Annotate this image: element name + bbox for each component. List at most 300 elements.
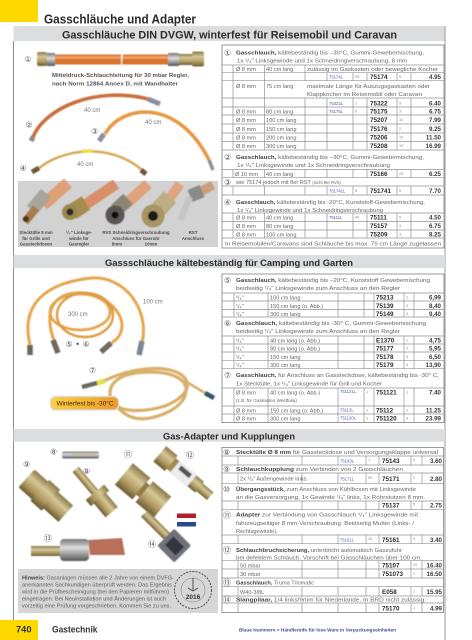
item 4: 100 cm lang	[266, 232, 296, 238]
item 9: 2	[413, 476, 415, 480]
item 6: 80 cm lang (o. Abb.)	[270, 346, 320, 352]
item 7: 751120	[376, 416, 397, 422]
item 5: beidseitig ¹/₄" Linksgewinde zum Anschluss an den Regler	[236, 286, 400, 292]
footer note: Blaue Nummern = Händlerinfo für lose Ware in Verpackungseinheiten	[239, 628, 396, 632]
item 13: 1	[413, 590, 415, 594]
item 6: 300 cm lang	[270, 363, 300, 369]
item 2: 6.25	[429, 171, 442, 178]
item 4: 8.25	[429, 232, 442, 238]
connector captions: Anschluss	[182, 236, 205, 241]
item 7: Ø 8 mm	[236, 408, 256, 414]
connector captions: ¹/₄" Linksge-	[66, 230, 93, 235]
item 3: ③	[224, 178, 231, 187]
item 12: 75107	[382, 562, 400, 570]
item 1: Ø 8 mm	[236, 136, 256, 142]
item 13: W40-3/8L	[240, 590, 264, 596]
picture: fitting 10	[66, 462, 121, 520]
item 5: Gasschlauch, kältebeständig bis –20°C, Kunststoff Gewebemischung	[236, 278, 430, 284]
item 1: 40 cm lang	[266, 67, 293, 73]
table 1: DVGW hoses	[222, 45, 444, 248]
item 3	[224, 178, 442, 195]
picture: fitting 11	[115, 463, 172, 517]
connector captions: Gasregler	[69, 242, 90, 246]
picture: hose 2	[31, 95, 160, 141]
section band 1: Gasschläuche DIN DVGW, winterfest für Reisemobil und Caravan	[62, 30, 397, 42]
item 12	[223, 546, 443, 578]
item 1: 75176	[370, 126, 388, 133]
picture: hose 1	[37, 52, 204, 66]
icon: Dutch flag	[177, 514, 196, 526]
item 1: 6.40	[429, 100, 442, 108]
footer section name: Gastechnik	[52, 624, 98, 636]
item 1: Ø 8 mm	[236, 118, 256, 124]
label: 40 cm: 40 cm	[77, 162, 93, 168]
item 7: 751121	[376, 390, 397, 396]
page frame left line	[13, 41, 14, 620]
item 2: 1x ¹/₄" Linksgewinde und 1x Schneidringverschraubung	[237, 163, 390, 169]
item 13: ⑬	[223, 578, 231, 588]
item 4: 40	[355, 216, 359, 220]
item 12: 10	[413, 563, 417, 567]
item 10: 5	[413, 502, 415, 506]
item 1: 75322	[370, 100, 388, 108]
item 9: ⑨	[223, 465, 230, 474]
item 8: 3.60	[430, 458, 443, 465]
hose 1 description: Mitteldruck-Schlauchleitung für 30 mbar Regler,	[52, 73, 190, 79]
item 12: 50 mbar	[240, 564, 261, 570]
item 1: 25	[355, 75, 359, 79]
item 7: 751121L	[340, 389, 357, 394]
item 5: 3	[406, 312, 408, 316]
item 2	[224, 153, 442, 178]
item 6: 13,90	[426, 362, 442, 369]
item 3: wie 75174 jedoch mit 8er RST (nicht 8er RVS)	[235, 180, 342, 186]
note text: anerkannten Sachkundigen überprüft werden. Das Ergebnis	[22, 582, 172, 588]
item 7: 1	[366, 408, 368, 412]
item 5: 6,99	[429, 294, 442, 302]
item 1: 1	[355, 102, 357, 106]
item 1: Ø 8 mm	[236, 127, 256, 133]
item 3: 751741	[370, 188, 392, 195]
item 14: ⑭	[223, 596, 231, 604]
item 7: 40 cm lang (o. Abb.)	[270, 390, 320, 396]
connector: RVS 10 mm	[142, 184, 180, 228]
item 14: Slangpilaar, 1/4 links/9mm für Niederlande. In BRD nicht zulässig.	[236, 598, 427, 604]
callout: number 14: ⑭	[148, 540, 156, 549]
item 1: 80 cm lang	[266, 110, 293, 116]
item 5: 1	[406, 296, 408, 300]
note text	[22, 576, 174, 610]
item 10	[223, 485, 443, 510]
connector captions: Gassteckdosen	[20, 242, 53, 246]
callout: number 11: ⑪	[124, 450, 132, 459]
callout: number 8: ⑧	[50, 448, 57, 456]
connector captions: 10mm	[145, 242, 157, 246]
item 9: Schlauchkupplung zum Verbinden von 2 Gasschläuchen	[236, 467, 403, 473]
item 5: 75149	[376, 311, 394, 318]
item 4: 75157	[370, 223, 388, 230]
item 7: 150 cm lang (o. Abb.)	[270, 408, 323, 414]
item 1: Ø 8 mm	[236, 144, 256, 150]
item 8: 5	[413, 458, 415, 462]
connector: RVS 8 mm	[106, 184, 148, 224]
picture: fitting 8	[62, 452, 99, 458]
item 7: Ø 8 mm	[236, 390, 256, 396]
item 3: 5	[399, 189, 401, 193]
item 4: 4.50	[429, 214, 442, 222]
item 7: 7.40	[429, 390, 442, 396]
item 1: 150 cm lang	[266, 127, 296, 133]
item 1: 300 cm lang	[266, 144, 296, 150]
note text: eingetragen. Bei Neuinstallation und Änderungen ist auch	[22, 596, 166, 602]
item 11: ⑪	[223, 511, 231, 520]
item 4: ④	[224, 198, 231, 207]
section band 2: Gassschläuche kältebeständig für Camping und Garten	[105, 258, 353, 268]
picture: fitting 9	[17, 468, 75, 524]
item 1: maximale Länge für Auszugsgaskasten oder	[307, 84, 430, 90]
item 7: 1	[406, 390, 408, 394]
item 6: beidseitig ¹/₄" Linksgewinde zum Anschluss an den Regler	[236, 329, 400, 335]
table 3: adapters	[222, 448, 444, 612]
item 4: Ø 8 mm	[236, 216, 256, 222]
item 2: ②	[224, 153, 231, 162]
item 11: 3.40	[430, 537, 443, 544]
item 11: 75161L	[340, 538, 355, 542]
item 7: 75112L	[340, 408, 354, 412]
item 8: 1	[368, 458, 370, 462]
connector: Stecktülle	[23, 183, 68, 222]
item 10: Übergangsstück, zum Anschluss von Kühlboxen mit Linksgewinde	[236, 486, 416, 493]
item 8	[223, 448, 443, 465]
item 5: ⑤	[224, 276, 231, 285]
item 1: 5	[399, 102, 401, 106]
item 4: 3	[399, 232, 401, 236]
item 1: 75208	[370, 143, 388, 150]
item 7: 11.25	[426, 408, 442, 414]
item 9: 75171L	[340, 476, 355, 482]
section band 3	[14, 429, 445, 442]
picture: coiled hoses 5 and 6	[28, 278, 144, 355]
item 7: 75112	[376, 408, 394, 414]
item 1: Ø 8 mm	[236, 84, 256, 90]
item 1: Ø 8 mm	[236, 67, 256, 73]
item 7: 1	[366, 416, 368, 420]
item 5: 75139	[376, 303, 394, 310]
item 1: 5	[355, 110, 357, 114]
item 2: Ø 10 mm	[235, 172, 258, 178]
item 11: fahrzeugseitiger 8 mm-Verschraubung. Beidseitig Mutter (Links- /	[236, 521, 414, 527]
item 1: 10	[399, 118, 403, 122]
item 5: 300 cm lang	[270, 312, 300, 318]
callout: number 2: ②	[26, 120, 33, 130]
note text: wird in die Prüfbescheinigung (bei den Papieren mitführen)	[22, 590, 169, 596]
item 11: 75161	[382, 537, 400, 544]
item 1: 75175	[370, 108, 388, 116]
item 5: 75213	[376, 294, 394, 302]
item 1: 100 cm lang	[266, 118, 296, 124]
table 2: camping hoses	[222, 274, 444, 422]
item 8: 75143L	[340, 458, 355, 464]
item 9: 50	[368, 476, 372, 480]
item 11	[223, 511, 443, 544]
item 7: Ø 8 mm	[236, 416, 256, 422]
hose 1 description: nach Norm 12864 Annex D, mit Wandhalter	[52, 82, 178, 88]
item 5: 3	[406, 304, 408, 308]
item 6: 3	[406, 363, 408, 367]
item 1: 75 cm lang	[266, 84, 293, 90]
item 13	[223, 578, 443, 596]
item 5: ¹/₄"	[236, 312, 244, 318]
item 5: ¹/₄"	[236, 304, 244, 310]
item 1: Ø 8 mm	[236, 110, 256, 116]
item 6: 75179	[376, 362, 394, 369]
item 6	[224, 319, 442, 369]
item 4: 75111L	[329, 215, 343, 220]
page frame right line	[444, 26, 446, 640]
item 1: 6.75	[429, 108, 442, 116]
note text: Hinweis: Gasanlagen müssen alle 2 Jahre von einem DVFG-	[22, 576, 174, 582]
item 5	[224, 276, 442, 318]
item 7: 3	[406, 416, 408, 420]
item 11: 10	[368, 537, 372, 541]
item 6: ¹/₄"	[236, 363, 244, 369]
item 3: 5	[355, 189, 357, 193]
item 8: Stecktülle Ø 8 mm für Gassteckdose und Versorgungsklappe universal	[236, 450, 438, 456]
item 5: ¹/₄"	[236, 296, 244, 302]
item 5: 9,40	[429, 311, 442, 318]
item 1: 2	[399, 127, 401, 131]
item 9	[223, 465, 443, 483]
callout: number 13: ⑬	[44, 534, 52, 543]
item 1: 75207	[370, 117, 388, 124]
item 9: 2x ¹/₄" Außengewinde links.	[240, 476, 308, 482]
connector captions: Anschluss für Gasrohr	[112, 236, 160, 241]
page title: Gasschläuche und Adapter	[44, 12, 196, 26]
item 6: 3	[406, 346, 408, 350]
item 1	[224, 48, 442, 150]
item 1: 4.95	[429, 74, 442, 81]
picture: fitting 14	[135, 506, 191, 563]
item 6: 40 cm lang (o. Abb.)	[270, 338, 320, 344]
connector captions: Stecktülle 8 mm	[19, 230, 53, 235]
connector captions: 8mm	[112, 242, 122, 246]
item 14	[223, 596, 443, 612]
item 4: 75209	[370, 232, 388, 238]
yellow corner tab top	[0, 0, 38, 22]
item 7: 300 cm lang	[270, 416, 300, 422]
item 1: 75174L	[329, 74, 344, 80]
item 3: 751741L	[329, 188, 346, 194]
item 6: 5,95	[429, 346, 442, 352]
item 1: 10	[399, 144, 403, 148]
label: 40 cm: 40 cm	[145, 120, 161, 126]
item 11: 3	[413, 537, 415, 541]
item 1: 3	[399, 110, 401, 114]
item 4: 80 cm lang	[266, 224, 293, 230]
icon: inspection stamp 2016: 2016	[186, 594, 201, 601]
item 4: 3	[399, 224, 401, 228]
item 12: 16.40	[427, 562, 443, 570]
item 9: 2.80	[430, 476, 443, 483]
item 4: 1x ¹/₄" Linksgewinde und 1x Schneidringverschraubung	[237, 208, 383, 214]
picture: fitting 12	[153, 446, 217, 504]
label: 100 cm: 100 cm	[143, 300, 163, 306]
item 2: 75166	[370, 171, 388, 178]
yellow page number tab: 740	[16, 624, 32, 634]
item 6: ¹/₄"	[236, 346, 244, 352]
item 10: ⑩	[223, 485, 230, 494]
item 3: 7.70	[429, 188, 442, 195]
item 13: 15.95	[427, 589, 443, 596]
item 4: Ø 8 mm	[236, 232, 256, 238]
section band 3: Gas-Adapter und Kupplungen	[163, 432, 295, 442]
callout: hose 1 number: ①	[24, 55, 32, 64]
item 1: 9.25	[429, 126, 442, 133]
item 4	[224, 198, 442, 248]
item 7: 1x Stecktülle, 1x ¹/₄" Linksgewinde für Grill und Kocher	[236, 382, 382, 388]
section band 1	[14, 26, 445, 42]
item 1: 75322L	[329, 101, 344, 106]
picture: hose 4	[32, 151, 146, 174]
connector: RST	[180, 185, 213, 220]
connector captions: RST	[189, 230, 198, 235]
item 1: 75174	[370, 74, 388, 81]
item 5: 8,40	[429, 303, 442, 310]
item 12: Schlauchbruchsicherung, unterbricht automatisch Gaszufuhr	[236, 548, 402, 554]
item 7: 1	[366, 390, 368, 394]
item 6: E1370	[376, 338, 395, 344]
item 6: 150 cm lang	[270, 355, 300, 361]
item 6: 6,50	[429, 354, 442, 361]
item 6: 75177	[376, 346, 394, 352]
item 8: 75143	[382, 458, 400, 465]
item 1: 200 cm lang	[266, 136, 296, 142]
callout: number 7: ⑦	[89, 366, 96, 375]
item 2: 25	[399, 172, 403, 176]
icon: inspection stamp 2016	[174, 572, 212, 608]
item 14: 1	[413, 606, 415, 610]
panel: Hinweis note	[18, 569, 218, 613]
item 12: bei defektem Schlauch. Vorschrift bei Gasschläuchen über 100 cm.	[236, 556, 422, 562]
item 4: Ø 8 mm	[236, 224, 256, 230]
item 1: 7.99	[429, 117, 442, 124]
item 10: 75137	[382, 502, 400, 510]
item 7: ⑦	[224, 371, 231, 380]
item 14: 75170	[382, 606, 400, 612]
callout: number 4: ④	[20, 164, 27, 173]
item 12: ⑫	[223, 546, 231, 555]
connector captions: RVS Schneidringverschraubung	[102, 230, 170, 235]
callout: number 12: ⑫	[186, 451, 194, 460]
item 5: 100 cm lang	[270, 296, 300, 302]
item 7: Gasschlauch, für Anschluss an Gassteckdose, kältebeständig bis -30° C,	[236, 373, 439, 379]
item 1: 16.99	[426, 143, 442, 150]
yellow page number tab	[0, 620, 38, 640]
item 8: ⑧	[223, 448, 230, 457]
item 1: 5	[399, 75, 401, 79]
item 7: (z.B. für Gaskasten Westfalia)	[236, 398, 297, 403]
item 12: 1	[413, 572, 415, 576]
item 1: 75175L	[329, 109, 344, 114]
table 3 grid	[222, 448, 444, 612]
item 2: 40 cm lang	[266, 172, 293, 178]
item 12: 751073	[382, 571, 404, 578]
hose 1 description	[52, 73, 190, 88]
item 12: 30 mbar	[240, 572, 261, 578]
callout: number 9: ⑨	[23, 460, 30, 469]
label: 300 cm: 300 cm	[68, 312, 88, 318]
item 2: Gasschlauch, kältebeständig bis –30°C, Gummi-Gewebemischung,	[236, 155, 424, 161]
item 7: 751120L	[340, 416, 357, 420]
item 1: Klappkocher im Reisemobil oder Caravan	[307, 92, 422, 98]
badge: Winterfest	[50, 396, 118, 410]
item 6: ¹/₄"	[236, 338, 244, 344]
item 11: Adapter zur Verbindung von Gasschlauch ¹/₄" Linksgewinde mit	[236, 512, 418, 518]
item 1: 10	[399, 136, 403, 140]
item 7: 23.99	[426, 416, 442, 422]
panel: connector types	[18, 181, 218, 247]
item 13: Gasschlauch, Truma Triomatic	[236, 580, 314, 586]
connector captions: für Grills und	[22, 236, 50, 241]
item 6: 1	[406, 338, 408, 342]
item 1: 11.50	[426, 134, 442, 142]
item 5: 150 cm lang (o. Abb.)	[270, 304, 323, 310]
item 6: 4,75	[429, 338, 442, 344]
item 4: 40 cm lang	[266, 216, 293, 222]
item 6: 3	[406, 355, 408, 359]
item 14: 4.99	[430, 606, 443, 612]
connector captions: winde für	[68, 236, 89, 241]
picture: hose 7	[82, 369, 214, 419]
item 1: 75206	[370, 134, 388, 142]
item 4: 75111	[370, 214, 387, 222]
table 2 grid	[222, 274, 444, 422]
item 4: 6.75	[429, 223, 442, 230]
item 6: 75178	[376, 354, 394, 361]
item 7	[224, 371, 442, 422]
callout: number 10: ⑧	[83, 467, 90, 476]
label: 40 cm: 40 cm	[84, 108, 100, 114]
picture: hose 3	[99, 112, 213, 170]
item 6: ¹/₄"	[236, 355, 244, 361]
item 10: an die Gasversorgung, 1x Gewinde ¹/₄" links, 1x Rohrstutzen 8 mm.	[236, 495, 425, 501]
item 13: E058	[382, 589, 397, 596]
item 1: 1x ¹/₄" Linksgewinde und 1x Schneidringverschraubung, 8 mm	[237, 58, 407, 64]
item 10: 2.75	[430, 502, 443, 510]
item 4: In Reisemobilen/Caravans sind Schläuche bis max. 75 cm Länge zugelassen	[225, 242, 441, 248]
item 4: 5	[399, 216, 401, 220]
note text: vorzeitig eine Prüfung vorgeschrieben. Kommen Sie zu uns.	[22, 604, 171, 610]
section band 2	[14, 255, 445, 268]
connector: Linksgewinde	[62, 184, 116, 220]
badge: Winterfest: Winterfest bis -30°C	[56, 402, 114, 408]
callout: number 3: ③	[91, 127, 98, 136]
item 12: 16.50	[427, 571, 443, 578]
connector captions	[19, 230, 205, 246]
picture: fitting 13	[31, 538, 125, 561]
item 1: zulässig im Gaskasten oder bewegliche Kocher	[307, 67, 438, 73]
item 7: 2	[406, 408, 408, 412]
item 9: 75171	[382, 476, 400, 483]
item 6: Gasschlauch, kältebeständig bis -30° C, Gummi-Gewebemischung	[236, 321, 426, 327]
item 6: ⑥	[224, 319, 231, 328]
item 11: Rechtsgewinde).	[236, 529, 278, 535]
table 1 grid	[222, 45, 444, 248]
item 1: ①	[224, 48, 231, 58]
callout: numbers 5 and 6: ⑤ • ⑥	[66, 340, 90, 349]
item 4: Gasschlauch, kältebeständig bis -20°C, Kunststoff-Gewebemischung,	[236, 200, 425, 206]
item 1: Gasschlauch, kältebeständig bis –30°C, Gummi-Gewebemischung,	[236, 50, 424, 56]
